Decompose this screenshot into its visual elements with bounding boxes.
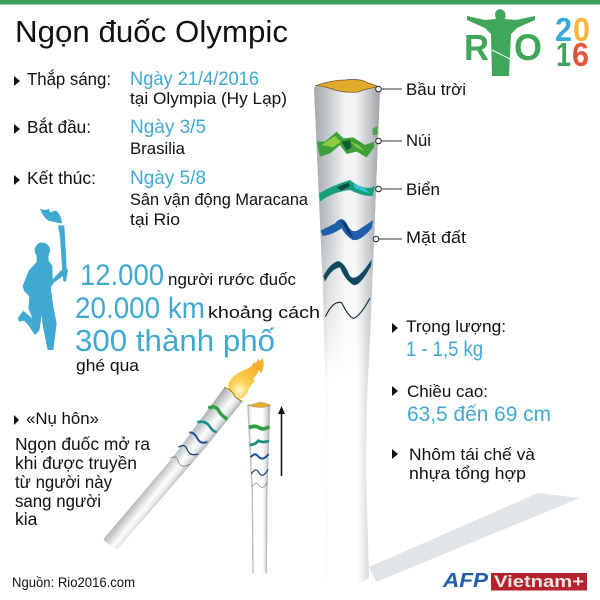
stat: 300 cities: 300 thành phố xyxy=(75,323,275,358)
stat: 20.000 km distance: khoảng cách xyxy=(208,303,320,322)
callout: sea xyxy=(376,180,440,199)
torch body lower xyxy=(314,87,380,585)
logo year 2016: 6 xyxy=(572,36,589,73)
upright torch cap xyxy=(247,402,270,407)
bullet xyxy=(14,415,19,425)
text block: the kiss: từ người này xyxy=(15,472,112,492)
logo letters RIO xyxy=(464,27,542,68)
tilted torch bands xyxy=(170,407,227,466)
logo: Vietnam+: Vietnam+ xyxy=(494,573,584,591)
logo year 2016 xyxy=(555,11,590,73)
spec: weight: 1 - 1,5 kg xyxy=(406,338,483,361)
torch wave bands xyxy=(317,126,378,318)
info: start date: Bắt đầu: xyxy=(27,116,91,137)
callout: land: Mặt đất xyxy=(406,228,466,247)
source: Nguồn: Rio2016.com xyxy=(12,575,135,590)
title: Ngọn đuốc Olympic xyxy=(15,14,288,49)
torch gold cap xyxy=(315,79,379,92)
info: lighting date xyxy=(14,68,287,108)
bullet xyxy=(14,76,20,86)
logo year 2016: 1 xyxy=(556,36,571,73)
callout: sky: Bầu trời xyxy=(406,80,466,99)
upright torch body xyxy=(247,405,270,573)
callout: mountain xyxy=(376,131,431,150)
info: end date xyxy=(14,168,309,229)
spec: height: 63,5 đến 69 cm xyxy=(407,403,551,426)
callout: land xyxy=(373,228,466,247)
upright torch bands xyxy=(249,426,269,487)
info: lighting date: Ngày 21/4/2016 xyxy=(130,69,259,90)
stat: 12.000 torch bearers: 12.000 xyxy=(80,259,164,292)
tilted torch with flame xyxy=(103,357,264,549)
band: dark teal xyxy=(323,259,372,285)
info: start date: Brasilia xyxy=(130,139,186,158)
text block: the kiss: kia xyxy=(15,509,38,529)
icon: Christ the Redeemer statue xyxy=(467,9,535,76)
info: lighting date: tại Olympia (Hy Lạp) xyxy=(130,89,287,108)
logo: AFP: AFP xyxy=(442,570,489,592)
band: blue, land xyxy=(321,219,373,240)
info: end date: Sân vận động Maracana xyxy=(130,190,309,209)
stat: 12.000 torch bearers: người rước đuốc xyxy=(168,270,296,289)
stat: 20.000 km distance xyxy=(75,292,320,325)
arrow: upward motion xyxy=(278,406,285,476)
band: green, sky xyxy=(317,132,374,157)
logo year 2016: 2 xyxy=(555,11,572,48)
logo letters RIO: R xyxy=(464,27,489,68)
bullet xyxy=(392,386,398,396)
upright torch xyxy=(247,402,270,573)
tilted torch rim xyxy=(224,387,243,402)
statue diagonal line xyxy=(492,50,510,59)
spec: weight xyxy=(392,317,506,361)
callout: sea: Biển xyxy=(406,180,440,199)
stat: 12.000 torch bearers xyxy=(80,259,296,292)
callout: mountain: Núi xyxy=(406,131,431,150)
callout: sky xyxy=(376,80,466,99)
main torch shadow xyxy=(369,493,580,582)
spec: weight: Trọng lượng: xyxy=(406,317,506,336)
band: thin wave xyxy=(325,298,370,318)
info: end date: tại Rio xyxy=(130,210,180,229)
bullet xyxy=(14,175,20,185)
info: lighting date: Thắp sáng: xyxy=(27,68,111,89)
main torch xyxy=(314,79,380,585)
spec: height xyxy=(392,382,551,426)
spec: material: nhựa tổng hợp xyxy=(409,464,526,483)
spec: height: Chiều cao: xyxy=(407,382,488,401)
info: start date xyxy=(14,116,206,158)
spec: material: Nhôm tái chế và xyxy=(409,445,536,464)
text block: the kiss: khi được truyền xyxy=(15,453,137,473)
bullet xyxy=(392,449,398,459)
upright torch side edges xyxy=(248,407,270,573)
text block: the kiss xyxy=(14,409,150,529)
logo year 2016: 0 xyxy=(573,11,590,48)
text block: the kiss: «Nụ hôn» xyxy=(26,409,99,428)
flame xyxy=(228,357,264,399)
info: end date: Kết thúc: xyxy=(27,168,96,188)
info: start date: Ngày 3/5 xyxy=(130,117,206,138)
text block: the kiss: sang người xyxy=(15,491,101,511)
logo letters RIO: O xyxy=(514,27,542,68)
bullet xyxy=(14,124,20,134)
stat: 300 cities: ghé qua xyxy=(76,356,140,375)
bullet xyxy=(392,323,398,333)
top green bar xyxy=(0,0,600,4)
icon: torch runner silhouette xyxy=(18,208,68,350)
torch body upper shading xyxy=(314,87,380,380)
text block: the kiss: Ngọn đuốc mở ra xyxy=(15,434,150,454)
logo: Rio 2016 xyxy=(464,9,590,76)
info: end date: Ngày 5/8 xyxy=(130,168,206,189)
spec: material xyxy=(392,445,536,483)
band: teal, sea xyxy=(319,180,375,202)
stat: 300 cities xyxy=(75,323,275,375)
tilted torch body xyxy=(103,387,243,549)
stat: 20.000 km distance: 20.000 km xyxy=(75,292,205,325)
